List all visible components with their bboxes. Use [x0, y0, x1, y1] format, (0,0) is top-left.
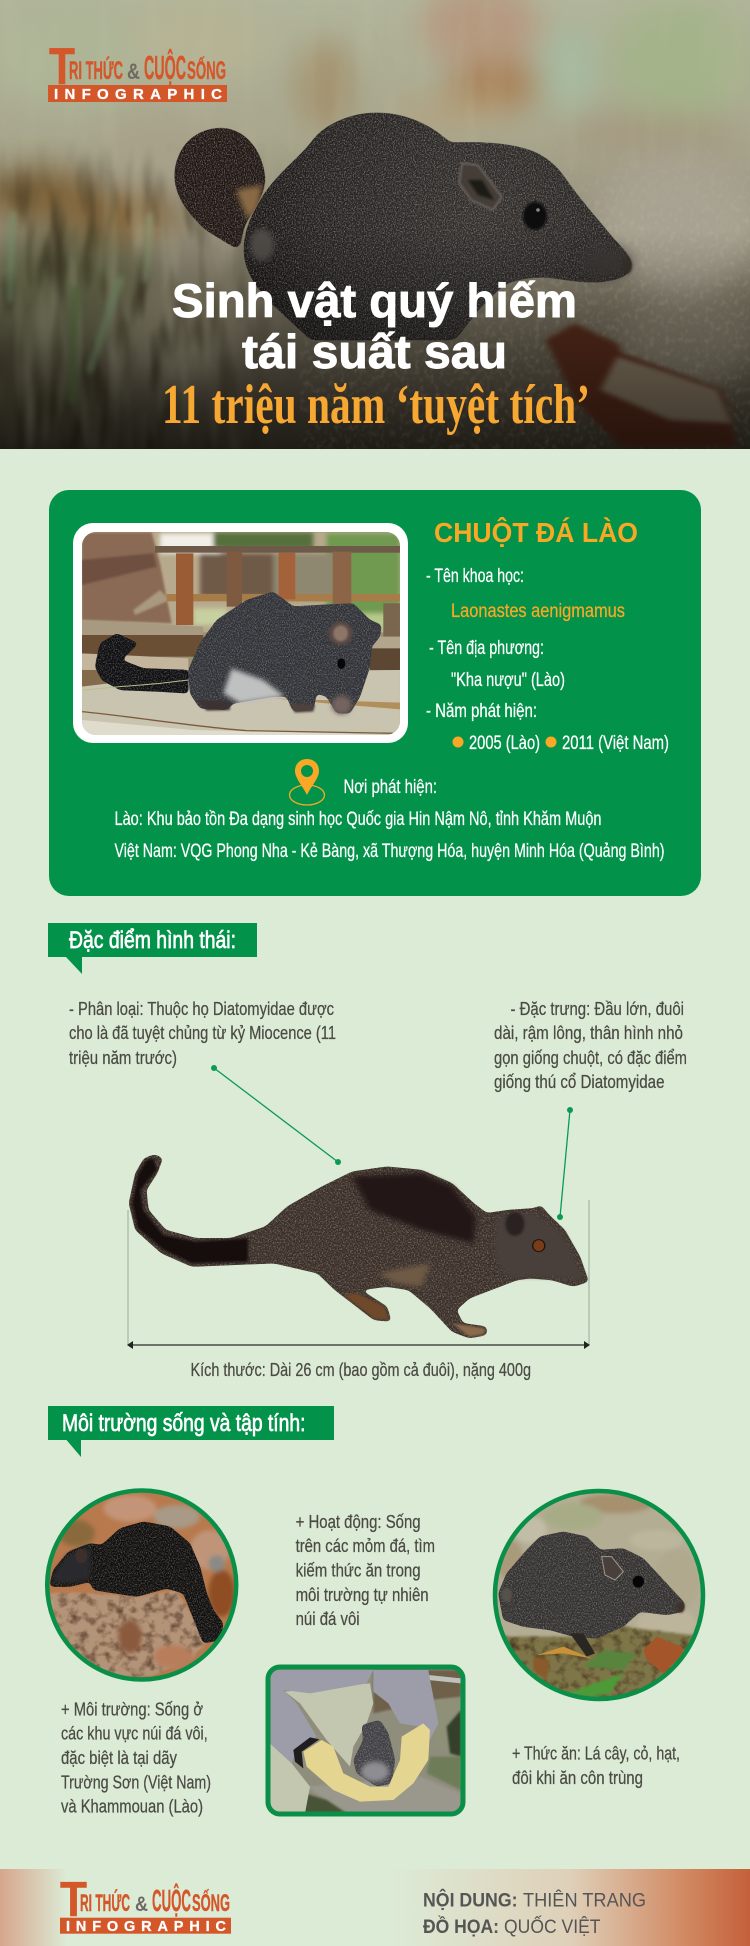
sandy ground specks: [300, 219, 750, 449]
rock: [50, 1590, 207, 1677]
text: food: [512, 1742, 680, 1788]
logo wordmark: CUỘC: [144, 48, 186, 86]
photo frame: [73, 523, 408, 743]
grass ground: [503, 1627, 703, 1700]
footer logo wordmark: T: [60, 1873, 87, 1927]
text: classification: [69, 998, 336, 1068]
dark overlay: [0, 230, 750, 449]
card heading: CHUỘT ĐÁ LÀO: [434, 516, 638, 548]
tail shading: [132, 1158, 248, 1263]
photo circle: rat on grass: [490, 1480, 710, 1705]
hero photo: rock rat in grass: [0, 0, 750, 449]
sleeves: [270, 1670, 373, 1763]
discovery year label: - Năm phát hiện:: [426, 701, 537, 722]
photo: rat held in gloves: [268, 1667, 463, 1814]
credits: NỘI DUNG:: [423, 1890, 518, 1912]
credits: QUỐC VIỆT: [504, 1916, 601, 1938]
text: habitat: và Khammouan (Lào): [61, 1796, 203, 1817]
title line 3: 11 triệu năm ‘tuyệt tích’: [162, 374, 590, 436]
logo wordmark: [49, 38, 226, 96]
rat ear: [459, 163, 502, 210]
eye: [533, 1240, 545, 1252]
text: characteristics: dài, rậm lông, thân hình nhỏ: [494, 1022, 683, 1043]
rat leg: [570, 1633, 595, 1657]
text: habitat: Trường Sơn (Việt Nam): [61, 1772, 211, 1793]
footer logo wordmark: &: [135, 1893, 148, 1916]
background right: [373, 1670, 461, 1713]
rat rump spot: [250, 229, 274, 261]
title line 2: tái suất sau: [242, 325, 507, 378]
heading: morphology: [48, 923, 257, 974]
discovery place: Laos: Lào: Khu bảo tồn Đa dạng sinh học Quốc gia Hin Nậm Nô, tỉnh Khăm Muộn: [114, 809, 602, 830]
text: activity: môi trường tự nhiên: [296, 1584, 429, 1605]
text: classification: triệu năm trước): [69, 1047, 177, 1068]
logo wordmark: RI THỨC: [69, 55, 123, 85]
text: classification: - Phân loại: Thuộc họ Diatomyidae được: [69, 998, 334, 1019]
fence rails and posts: [82, 546, 400, 735]
footer logo bar: [60, 1918, 231, 1934]
text: characteristics: [494, 998, 687, 1092]
footer logo bar text: INFOGRAPHIC: [66, 1919, 227, 1935]
rat feet: [197, 700, 230, 711]
gloves: [303, 1723, 430, 1802]
bullet: 2005: [452, 736, 464, 748]
heading: habitat and behaviour: Môi trường sống và tập tính:: [62, 1410, 306, 1437]
credits: THIÊN TRANG: [523, 1890, 646, 1912]
logo bar: [48, 85, 227, 102]
logo wordmark: T: [49, 38, 75, 96]
rat eye: [523, 202, 547, 230]
scientific name label: - Tên khoa học:: [426, 566, 524, 587]
year 2005: 2005 (Lào): [469, 733, 540, 754]
text: classification: cho là đã tuyệt chủng từ kỷ Miocence (11: [69, 1022, 336, 1043]
rat body: [188, 592, 382, 713]
year 2011: 2011 (Việt Nam): [562, 733, 669, 754]
rat: [50, 1522, 223, 1643]
grass texture top: [0, 0, 750, 170]
board: [307, 1777, 461, 1813]
belly and leg highlights: [378, 1263, 430, 1287]
leaf: [643, 1637, 683, 1673]
rat eye: [633, 1576, 644, 1588]
rat: [498, 1532, 685, 1638]
pointer: classification: [211, 1065, 341, 1165]
text: food: đôi khi ăn côn trùng: [512, 1767, 643, 1788]
heading: habitat and behaviour: [48, 1406, 334, 1457]
bullet: 2011: [546, 736, 556, 748]
icon: location pin: [290, 759, 324, 805]
rat ear: [602, 1557, 623, 1580]
heading: morphology: Đặc điểm hình thái:: [69, 927, 236, 954]
text: habitat: đặc biệt là tại dãy: [61, 1747, 178, 1768]
pointer: characteristics: [557, 1107, 573, 1220]
text: habitat: + Môi trường: Sống ở: [61, 1698, 203, 1720]
credits: ĐỒ HỌA:: [423, 1916, 499, 1938]
title line 1: Sinh vật quý hiếm: [172, 274, 577, 327]
back shading: [352, 1173, 476, 1243]
footer band: [0, 1869, 750, 1946]
fallen leaf: [545, 323, 737, 448]
local name label: - Tên địa phương:: [429, 638, 544, 659]
trousers: [285, 1683, 373, 1767]
text: activity: + Hoạt động: Sống: [296, 1511, 421, 1532]
text: activity: núi đá vôi: [296, 1608, 360, 1629]
text: characteristics: - Đặc trưng: Đầu lớn, đuôi: [510, 998, 684, 1019]
logo bar text: INFOGRAPHIC: [54, 86, 222, 103]
rat belly: [223, 668, 285, 703]
grass texture left: [0, 154, 266, 446]
rat nose: [677, 1602, 685, 1613]
rat tail: [95, 633, 188, 693]
size arrow: [127, 1341, 590, 1349]
photo circle: rat on rock: [44, 1488, 238, 1682]
text: size: Kích thước: Dài 26 cm (bao gồm cả đuôi), nặng 400g: [190, 1359, 531, 1380]
text: characteristics: giống thú cổ Diatomyidae: [494, 1071, 664, 1092]
dimension lines: [127, 1200, 590, 1349]
species photo: [82, 532, 400, 735]
logo wordmark: SỐNG: [187, 55, 226, 85]
rat head: [52, 1547, 90, 1583]
text: activity: trên các mỏm đá, tìm: [296, 1535, 435, 1556]
rat: [353, 1720, 395, 1787]
footer logo wordmark: SỐNG: [192, 1889, 230, 1917]
rat rump spot: [501, 1588, 512, 1602]
credits: [423, 1890, 646, 1938]
footer logo wordmark: [60, 1873, 230, 1927]
tree trunk: [82, 532, 172, 623]
rat tail: [175, 128, 265, 250]
floor: [82, 670, 400, 735]
logo: Tri Thức & Cuộc Sống Infographic: [48, 38, 227, 103]
illustration: full body rat: [129, 1154, 589, 1338]
rat eye: [337, 658, 345, 669]
scientific name: Laonastes aenigmamus: [451, 601, 625, 622]
rat ear: [329, 621, 353, 645]
text: activity: kiếm thức ăn trong: [296, 1560, 421, 1580]
text: activity: [296, 1511, 435, 1629]
panel: species card: [49, 490, 701, 896]
blurred background: [497, 1493, 700, 1640]
title: [162, 274, 590, 436]
footer logo: [60, 1873, 231, 1935]
text: habitat: các khu vực núi đá vôi,: [61, 1723, 208, 1744]
background stones: [47, 1495, 235, 1617]
ear: [505, 1212, 524, 1236]
rat snout: [582, 248, 630, 276]
rat snout: [332, 696, 352, 714]
planks: [82, 620, 203, 638]
head: [495, 1213, 584, 1280]
footer logo wordmark: CUỘC: [152, 1882, 191, 1918]
rat ear: [75, 1549, 87, 1563]
watch: [293, 1737, 319, 1768]
discovery place label: Nơi phát hiện:: [344, 777, 437, 798]
local name: "Kha nượu" (Lào): [451, 670, 565, 691]
logo wordmark: &: [127, 59, 140, 84]
text: characteristics: gọn giống chuột, có đặc điểm: [494, 1047, 687, 1068]
text: habitat: [61, 1698, 211, 1817]
text: food: + Thức ăn: Lá cây, cỏ, hạt,: [512, 1742, 680, 1764]
rat body: [244, 113, 632, 340]
footer logo wordmark: RI THỨC: [80, 1889, 130, 1917]
grass blades: [10, 215, 150, 400]
